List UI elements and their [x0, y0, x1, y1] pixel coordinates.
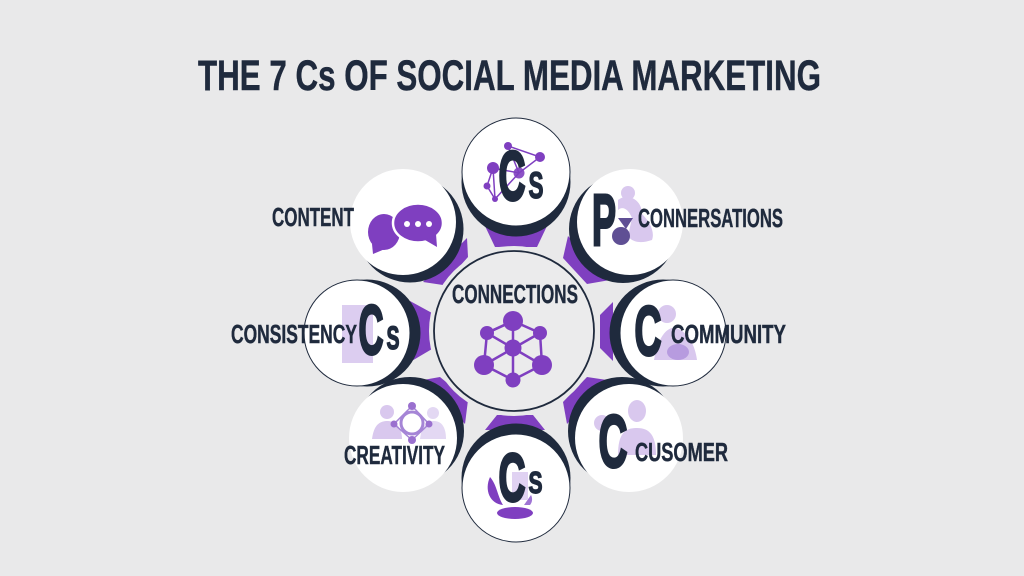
- letter C with s: S: [386, 320, 400, 356]
- circle: consistency: [231, 280, 420, 386]
- circle: creativity: [344, 377, 464, 492]
- label: CREATIVITY: [344, 440, 445, 470]
- letter C with s: C: [498, 440, 526, 516]
- hub label: CONNECTIONS: [452, 279, 578, 309]
- icon: people and network: [372, 402, 446, 444]
- circle: conversations: [569, 169, 783, 283]
- label: CONNERSATIONS: [638, 203, 783, 233]
- icon: people: [594, 400, 656, 455]
- circle: conversations: P: [592, 181, 616, 261]
- icon: network: [484, 142, 545, 202]
- central hub: [429, 246, 599, 416]
- icon: central network: [474, 311, 552, 388]
- icon: people: [654, 305, 697, 360]
- icon: people: [612, 186, 653, 245]
- icon: light document: [342, 305, 373, 363]
- circle: top Cs network: [462, 118, 570, 236]
- letter C: C: [634, 292, 662, 370]
- label: CONSISTENCY: [231, 319, 357, 349]
- letter C with s: S: [528, 465, 542, 500]
- label: CUSOMER: [635, 437, 728, 467]
- icon: hands and base: [488, 472, 533, 519]
- label: COMMUNITY: [671, 319, 786, 349]
- letter C with s: C: [358, 291, 384, 369]
- label: CONTENT: [272, 202, 354, 232]
- letter C with s: S: [528, 165, 544, 206]
- circle: bottom Cs: [462, 424, 570, 542]
- circle: community: [610, 280, 786, 386]
- letter C with s: C: [498, 137, 526, 215]
- purple connector pads: [410, 226, 613, 430]
- circle: customer: [568, 377, 728, 492]
- icon: chat bubbles: [368, 204, 443, 254]
- letter C: C: [598, 400, 628, 483]
- circle: content: [272, 169, 464, 282]
